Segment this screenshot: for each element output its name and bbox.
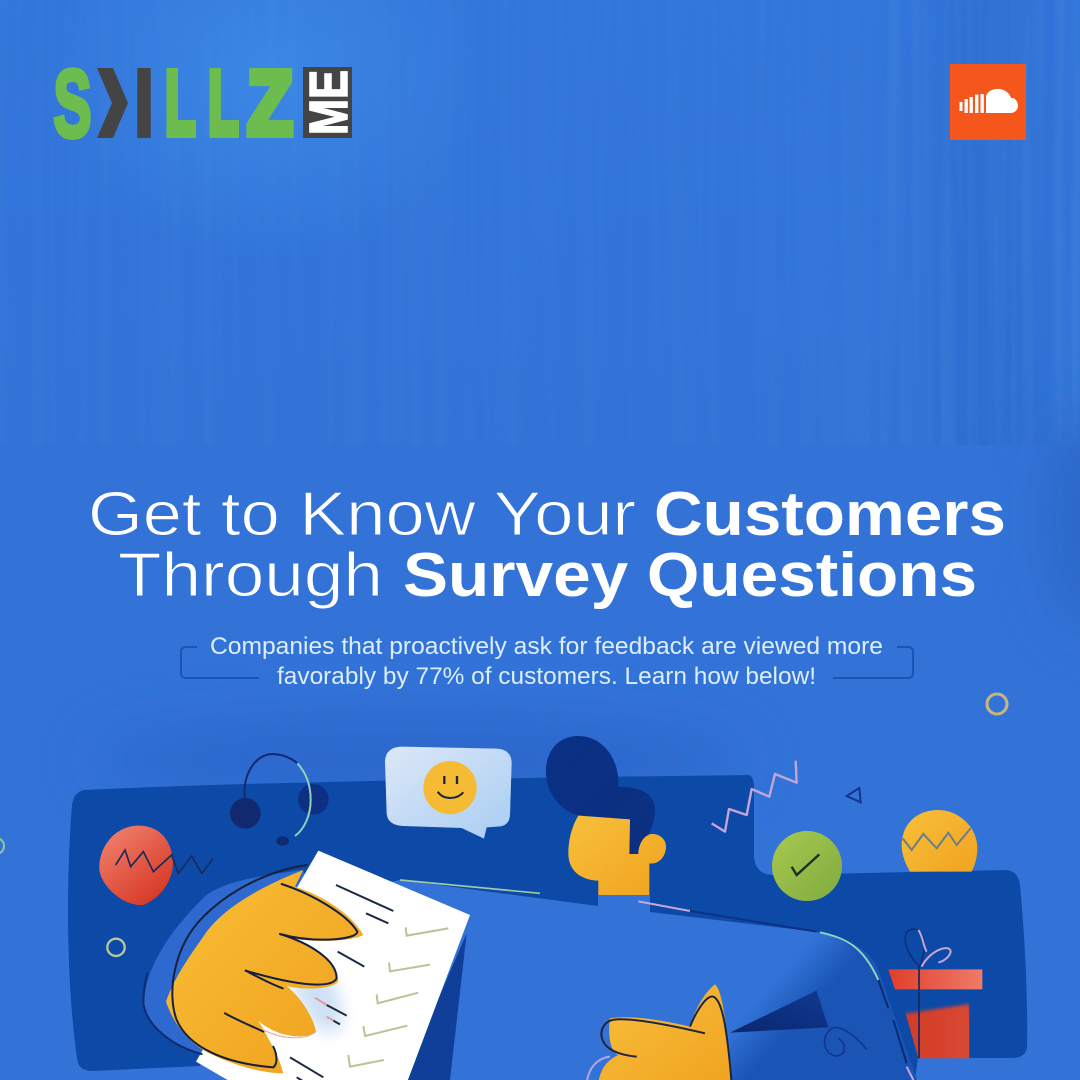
triangle xyxy=(847,788,861,802)
lower hand xyxy=(587,984,732,1080)
title: Customers xyxy=(654,480,1006,549)
swirl xyxy=(825,1028,867,1056)
paper finger shadow xyxy=(280,946,353,1041)
arm xyxy=(143,870,327,1080)
paper xyxy=(196,851,470,1080)
check marks xyxy=(348,927,448,1067)
logo: SkillzMe: S xyxy=(54,50,92,158)
yellow ball xyxy=(902,810,977,872)
right illustration group xyxy=(546,736,982,1080)
logo: SkillzMe xyxy=(54,50,359,158)
logo: SkillzMe: L xyxy=(208,54,238,154)
subtitle: Companies that proactively ask for feedback are viewed more xyxy=(210,633,883,660)
title: Survey Questions xyxy=(403,541,977,610)
green check badge xyxy=(772,831,842,901)
left illustration group xyxy=(99,747,540,1080)
headset xyxy=(230,754,329,846)
title xyxy=(88,480,1006,610)
small ring xyxy=(107,939,125,956)
head xyxy=(568,816,666,895)
red blob xyxy=(99,826,213,905)
icon: soundcloud xyxy=(950,64,1026,140)
hand holding paper xyxy=(166,870,363,1073)
dark cone xyxy=(730,991,828,1033)
dark blue backdrop shape xyxy=(68,775,1027,1080)
title: Get to Know Your xyxy=(88,480,636,549)
logo: SkillzMe: Z xyxy=(248,54,292,154)
hand outlines xyxy=(143,865,357,1067)
gift box xyxy=(888,929,982,1070)
paper shadow xyxy=(403,933,467,1080)
pink zigzag xyxy=(712,761,797,832)
survey lines xyxy=(290,885,393,1080)
logo: SkillzMe: L xyxy=(165,54,195,154)
sleeve xyxy=(730,933,918,1080)
shoulder line xyxy=(400,880,540,893)
title: Through xyxy=(118,541,383,610)
logo: SkillzMe: I xyxy=(136,54,152,154)
speech bubble xyxy=(385,747,512,839)
subtitle: favorably by 77% of customers. Learn how below! xyxy=(277,663,816,690)
subtitle xyxy=(210,633,883,690)
logo: SkillzMe: ME xyxy=(299,70,359,135)
hair xyxy=(546,736,655,854)
decorative ring top right xyxy=(987,694,1007,714)
left edge ring fragment xyxy=(0,838,4,854)
subtitle brackets xyxy=(181,647,913,678)
shoulder contour lines xyxy=(638,901,913,1080)
